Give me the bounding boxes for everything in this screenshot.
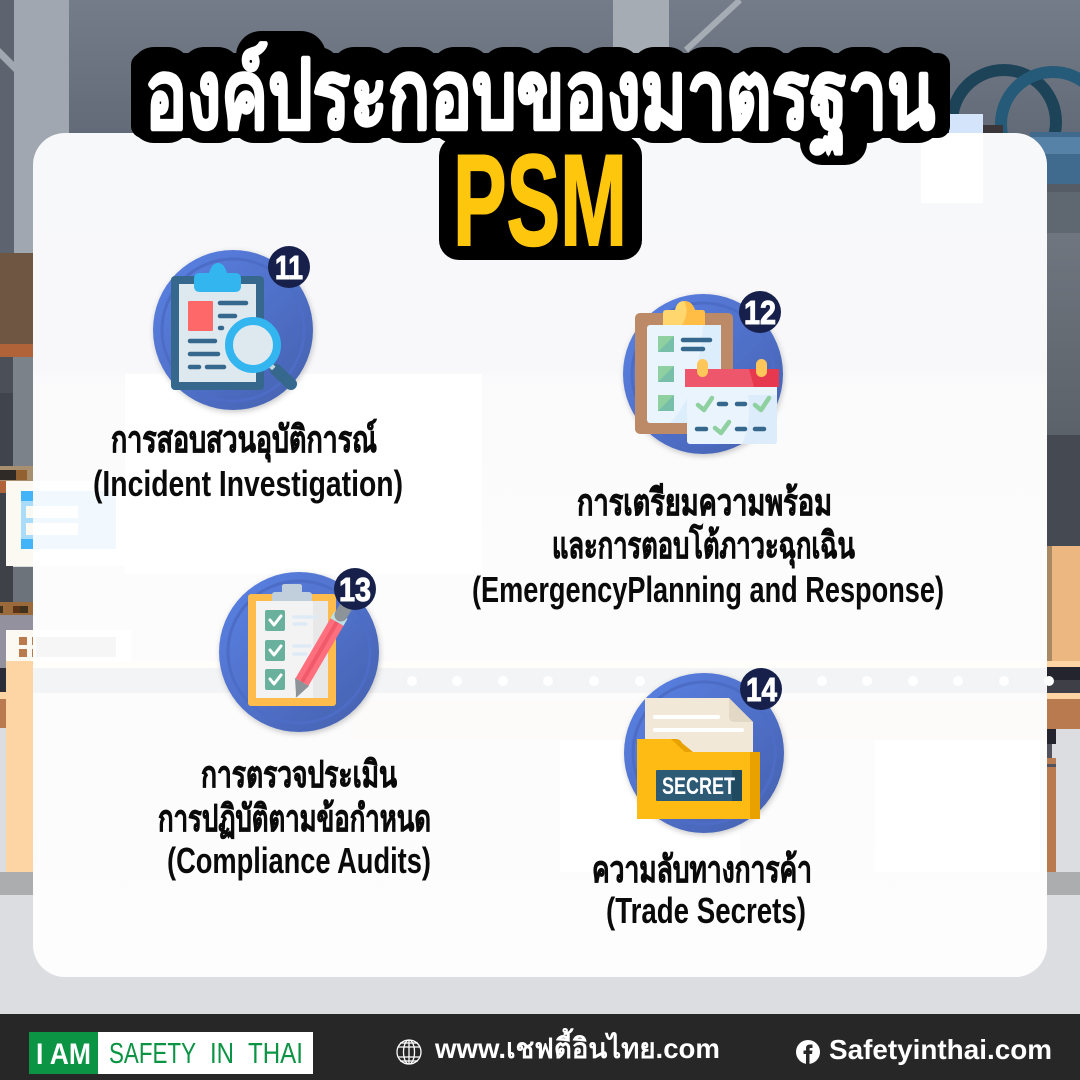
item 12: emergency planning [472, 291, 944, 610]
website address: www.เชฟตี้อินไทย.com [434, 1027, 720, 1064]
label: trade secrets: (Trade Secrets) [606, 890, 806, 931]
item 14: trade secrets [592, 668, 812, 931]
title: PSM: PSM [453, 127, 627, 273]
label: trade secrets: ความลับทางการค้า [592, 849, 812, 890]
facebook page name: Safetyinthai.com [829, 1034, 1052, 1065]
icon: secret folder [624, 673, 784, 833]
title: Thai heading [131, 31, 950, 165]
label: emergency planning and response: และการตอบโต้ภาวะฉุกเฉิน [552, 523, 855, 569]
badge: number 13: 13 [339, 571, 371, 608]
icon: clipboard and magnifier [153, 250, 313, 410]
logo: I AM Safety in Thai: SAFETY [109, 1038, 196, 1070]
label: compliance audits [158, 754, 431, 881]
panel: translucent white card [33, 133, 1054, 977]
label: emergency planning and response: การเตรียมความพร้อม [577, 482, 832, 523]
label: emergency planning and response [472, 482, 944, 610]
label: emergency planning and response: (EmergencyPlanning and Response) [472, 569, 944, 610]
logo: I AM Safety in Thai: THAI [248, 1038, 303, 1070]
label: incident investigation: (Incident Investigation) [93, 463, 403, 504]
item 11: incident investigation [93, 246, 403, 504]
item 13: compliance audits [158, 568, 431, 881]
label: incident investigation [93, 419, 403, 504]
label: compliance audits: การปฏิบัติตามข้อกำหนด [158, 798, 431, 839]
label: trade secrets [592, 849, 812, 931]
label: compliance audits: (Compliance Audits) [167, 840, 431, 881]
icon: secret folder: SECRET [662, 773, 735, 800]
badge: number 14: 14 [746, 671, 778, 708]
icon: globe [397, 1040, 421, 1064]
icon: checklist and calendar [623, 294, 783, 454]
badge: number 11: 11 [275, 249, 303, 286]
title: PSM [439, 127, 642, 273]
label: incident investigation: การสอบสวนอุบัติการณ์ [111, 419, 377, 463]
icon: facebook [796, 1040, 820, 1064]
logo: I AM Safety in Thai: I AM [36, 1038, 91, 1071]
footer bar [0, 1014, 1080, 1080]
logo: I AM Safety in Thai [29, 1032, 313, 1074]
icon: clipboard and pencil [219, 572, 379, 732]
logo: I AM Safety in Thai: IN [210, 1038, 234, 1070]
badge: number 12: 12 [744, 294, 776, 331]
label: compliance audits: การตรวจประเมิน [201, 754, 397, 795]
